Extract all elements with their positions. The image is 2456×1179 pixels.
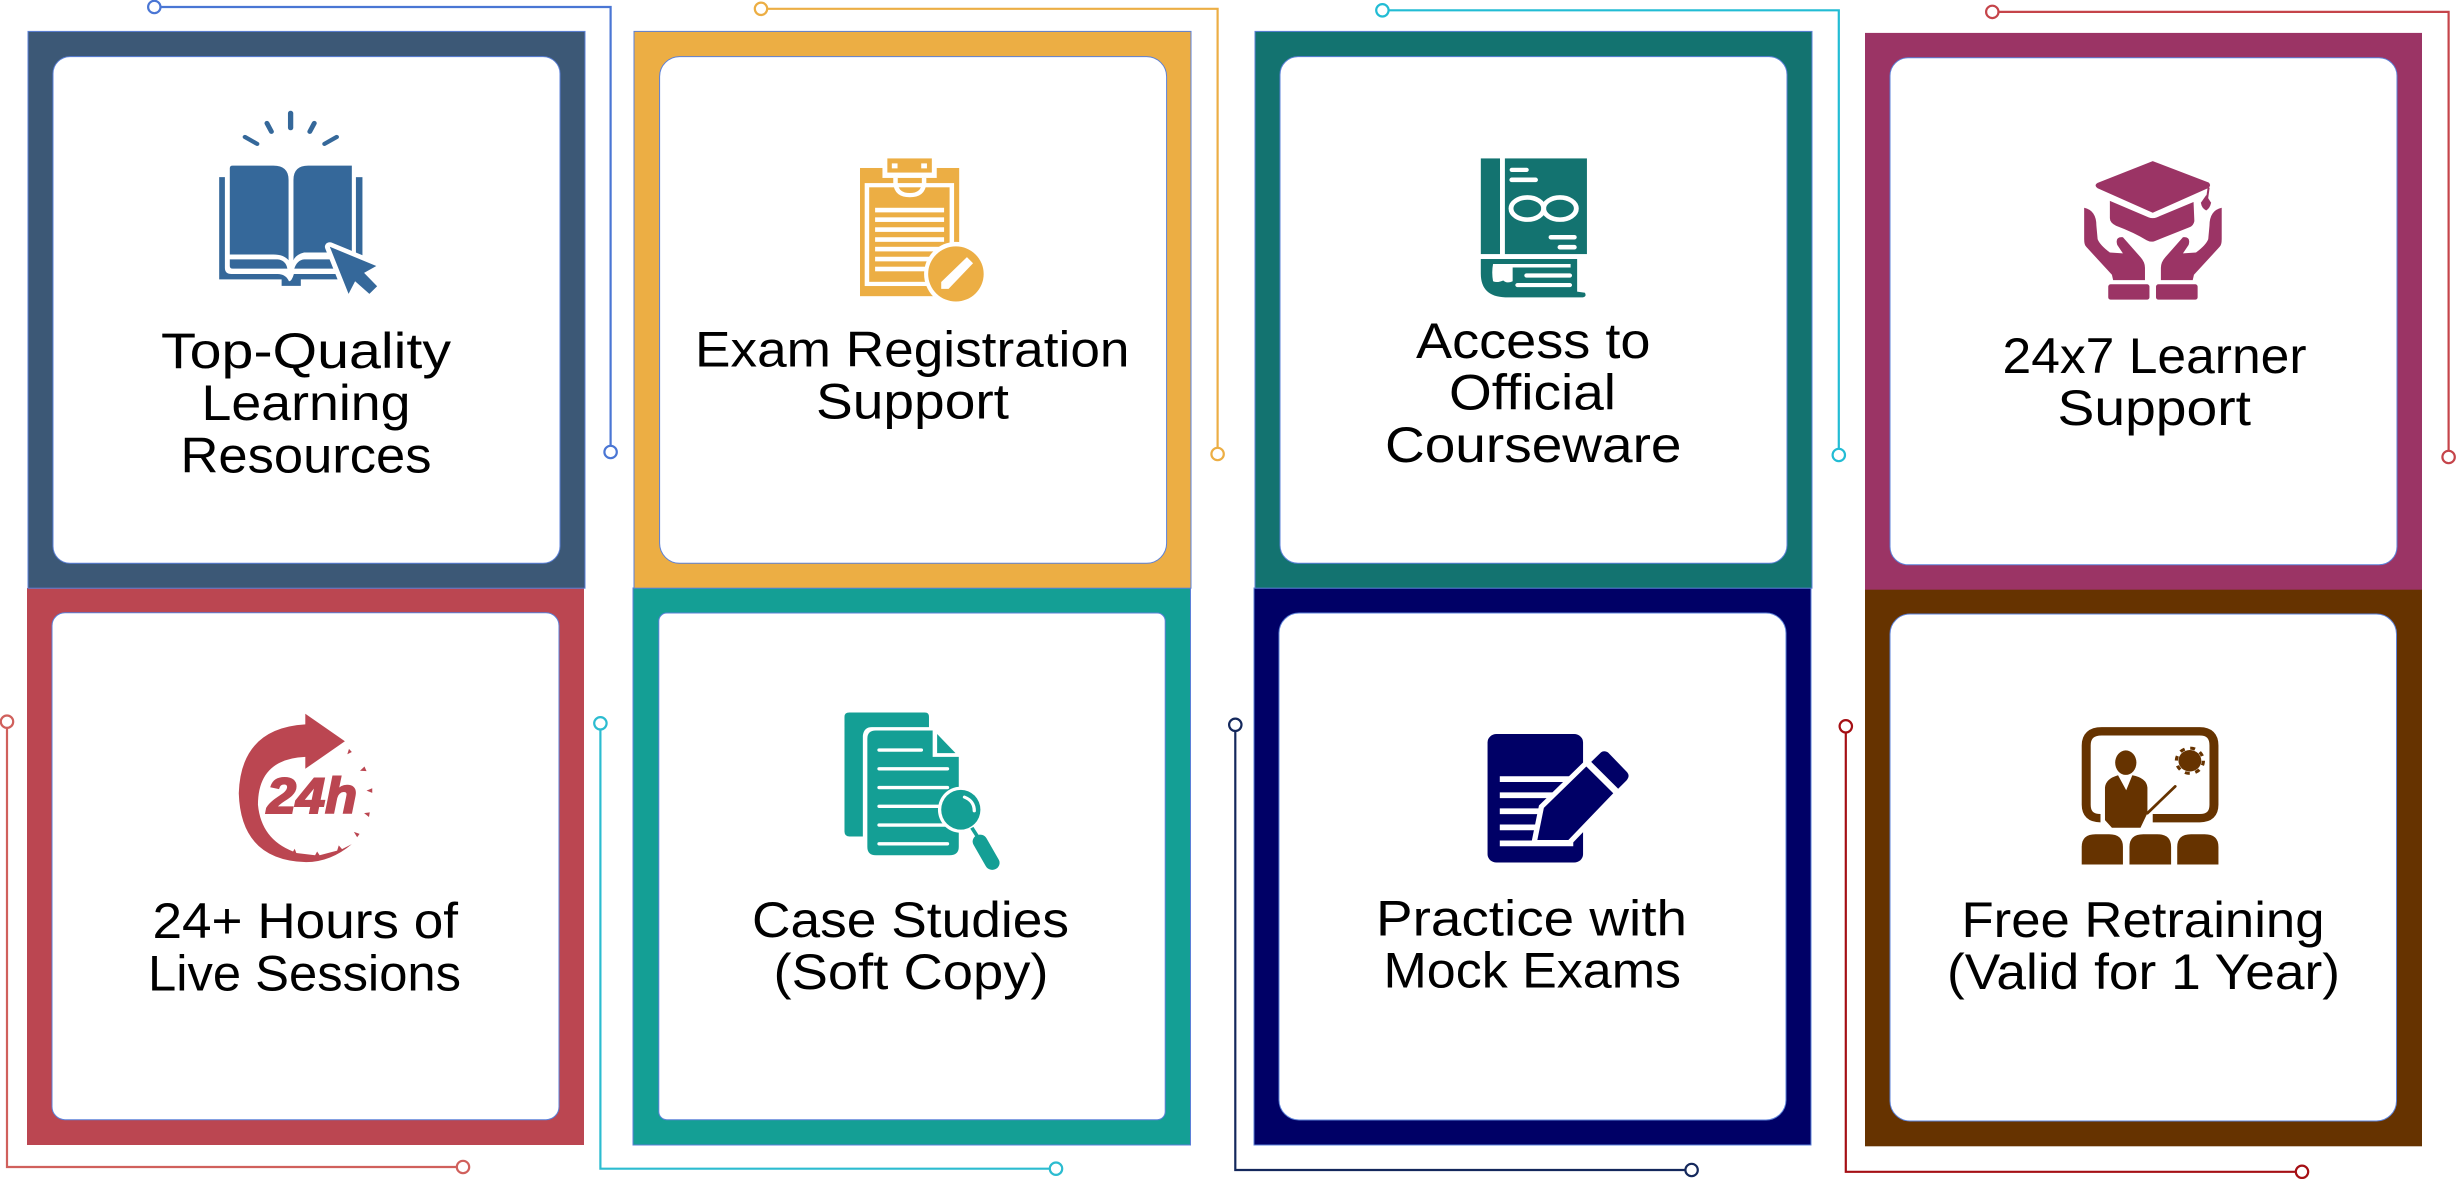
white card bbox=[53, 57, 560, 563]
label: Case Studies (Soft Copy) bbox=[752, 892, 1069, 1000]
label: Top-Quality Learning Resources: Learning bbox=[202, 375, 410, 431]
label: Practice with Mock Exams: Mock Exams bbox=[1384, 943, 1681, 999]
icon text: 24h: 24h bbox=[266, 768, 357, 824]
icon: clipboard with pencil badge bbox=[860, 155, 988, 306]
label: 24x7 Learner Support: Support bbox=[2058, 380, 2251, 436]
icon: book with infinity bbox=[1481, 158, 1587, 297]
label: Case Studies (Soft Copy): Case Studies bbox=[752, 892, 1069, 948]
panel: 24+ hours of live sessions bbox=[27, 588, 584, 1145]
label: 24+ Hours of Live Sessions bbox=[148, 893, 461, 1001]
label: Exam Registration Support: Exam Registration bbox=[695, 322, 1130, 378]
connector: learner support bbox=[1986, 6, 2455, 463]
panel: access to official courseware bbox=[1255, 31, 1812, 588]
panel frame bbox=[1255, 31, 1812, 588]
label: Top-Quality Learning Resources bbox=[161, 323, 451, 484]
label: Free Retraining (Valid for 1 Year): (Valid for 1 Year) bbox=[1947, 944, 2340, 1000]
label: Case Studies (Soft Copy): (Soft Copy) bbox=[774, 944, 1048, 1000]
label: Top-Quality Learning Resources: Top-Quality bbox=[161, 323, 451, 379]
white card bbox=[1280, 57, 1787, 563]
white card bbox=[1890, 614, 2396, 1121]
connector: case studies bbox=[594, 717, 1062, 1175]
connector: mock exams bbox=[1229, 719, 1698, 1176]
panel frame bbox=[28, 31, 585, 588]
white card bbox=[660, 57, 1167, 563]
label: 24x7 Learner Support bbox=[2002, 328, 2306, 436]
icon: documents with magnifier bbox=[844, 713, 992, 863]
label: Access to Official Courseware: Official bbox=[1449, 364, 1616, 420]
connector: learning resources bbox=[148, 1, 617, 458]
white card bbox=[1890, 58, 2397, 565]
panel: 24x7 learner support bbox=[1865, 33, 2422, 590]
label: Practice with Mock Exams: Practice with bbox=[1376, 891, 1687, 947]
connector: exam registration bbox=[755, 3, 1224, 460]
panel: case studies (soft copy) bbox=[633, 588, 1190, 1145]
icon: 24h clock arrow bbox=[239, 714, 372, 862]
connector: live sessions bbox=[1, 716, 469, 1173]
icon: trainer at board bbox=[2082, 731, 2218, 864]
label: Exam Registration Support: Support bbox=[816, 374, 1009, 430]
panel: free retraining bbox=[1865, 589, 2422, 1146]
panel frame bbox=[27, 588, 584, 1145]
label: Free Retraining (Valid for 1 Year) bbox=[1947, 892, 2340, 1000]
label: Exam Registration Support bbox=[695, 322, 1130, 430]
label: Access to Official Courseware: Courseware bbox=[1385, 417, 1682, 473]
label: Top-Quality Learning Resources: Resources bbox=[180, 428, 432, 484]
white card bbox=[1279, 613, 1786, 1120]
panel: practice with mock exams bbox=[1254, 588, 1811, 1145]
panel frame bbox=[634, 31, 1191, 588]
panel: exam registration support bbox=[634, 31, 1191, 588]
connector: courseware bbox=[1376, 4, 1845, 461]
panel frame bbox=[1865, 33, 2422, 590]
label: 24+ Hours of Live Sessions: 24+ Hours of bbox=[152, 893, 458, 949]
label: 24+ Hours of Live Sessions: Live Sessions bbox=[148, 945, 461, 1001]
label: 24x7 Learner Support: 24x7 Learner bbox=[2002, 328, 2306, 384]
panel frame bbox=[1865, 589, 2422, 1146]
panel frame bbox=[633, 588, 1190, 1145]
label: Access to Official Courseware: Access to bbox=[1416, 313, 1650, 369]
icon: exam sheet and pencil bbox=[1488, 734, 1629, 863]
white card bbox=[659, 613, 1165, 1120]
white card bbox=[52, 613, 559, 1120]
label: Access to Official Courseware bbox=[1385, 313, 1682, 473]
connector: free retraining bbox=[1840, 720, 2308, 1178]
label: Free Retraining (Valid for 1 Year): Free Retraining bbox=[1962, 892, 2324, 948]
panel frame bbox=[1254, 588, 1811, 1145]
icon: graduation cap held by hands bbox=[2084, 161, 2222, 300]
panel: top-quality learning resources bbox=[28, 31, 585, 588]
label: Practice with Mock Exams bbox=[1376, 891, 1687, 999]
icon: open book with cursor bbox=[219, 113, 377, 294]
